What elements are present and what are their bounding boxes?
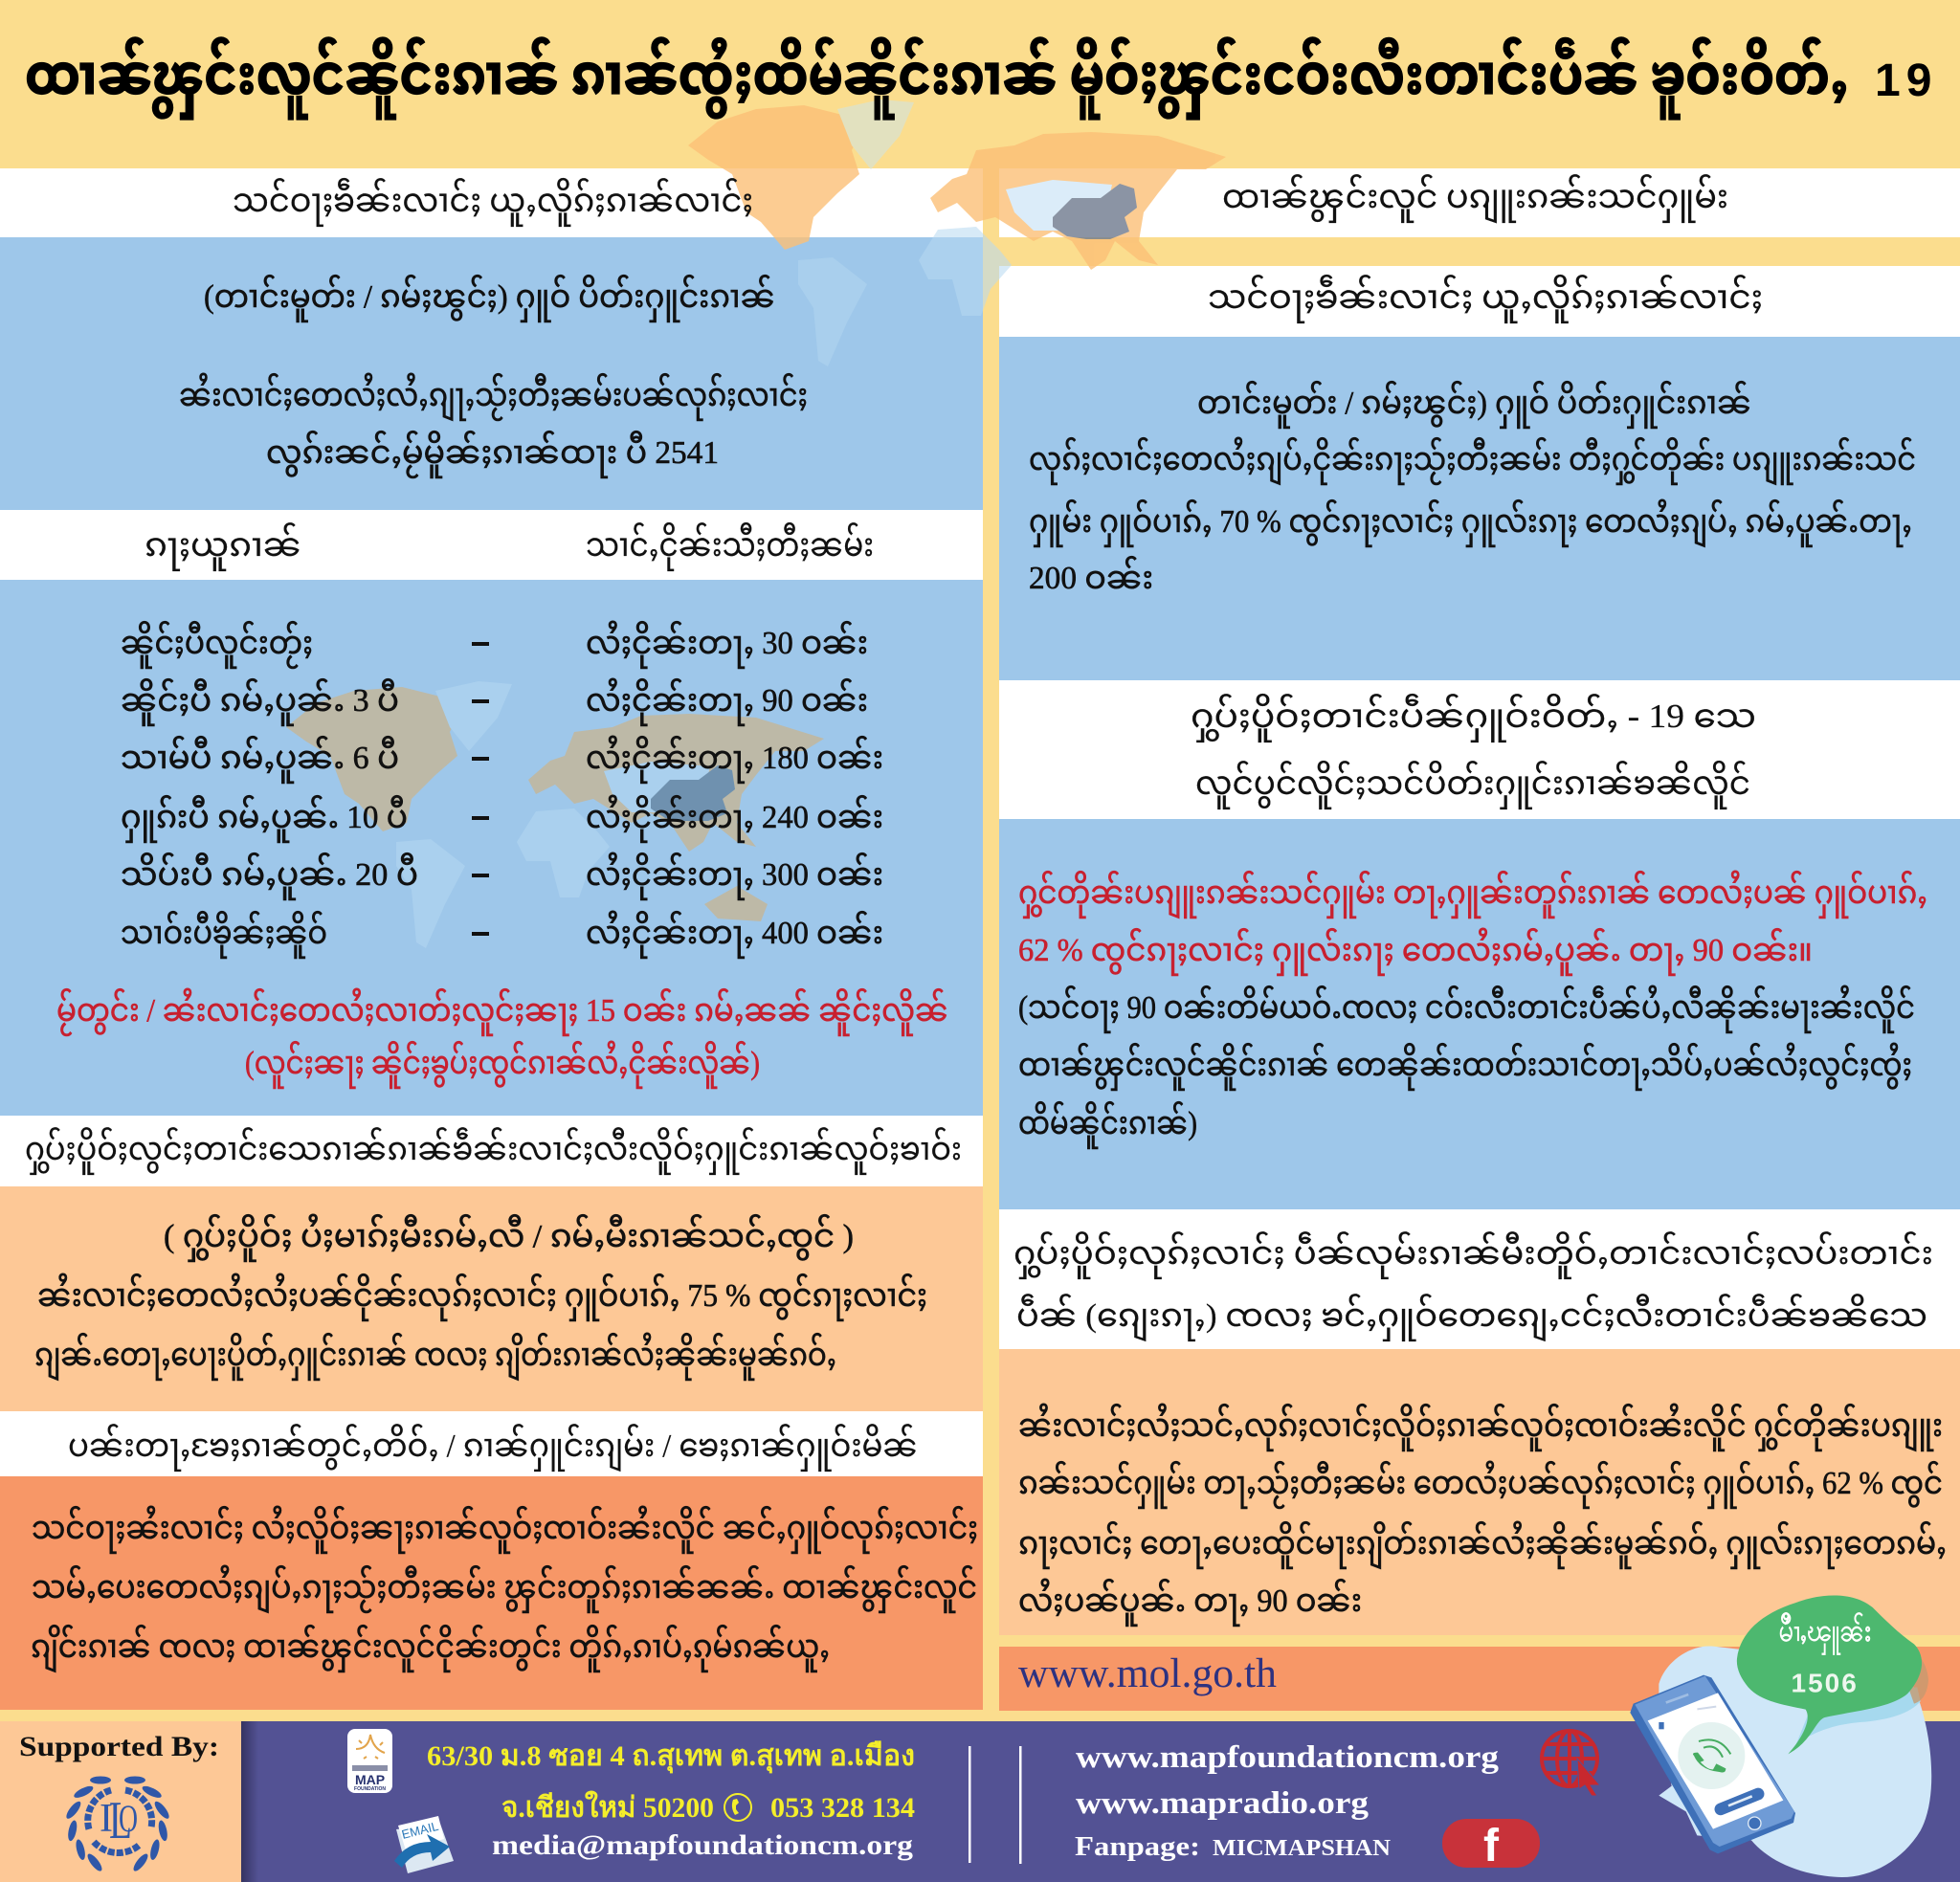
footer band — [0, 1721, 1960, 1882]
table header labels: သၢင်ႇငိုၼ်းသီႈတီႈၼမ်း — [586, 521, 874, 571]
supported by panel — [0, 1721, 258, 1882]
icon: ILO logo — [63, 1769, 172, 1874]
right covid red text: 62 % ၸွင်ၵႃႈလၢင်ႈ ႁူလ်းၵႃႈ တေလႆႈၵမ်ႇပူၼ်ႉ တႃႇ 90 ဝၼ်း။ — [1018, 926, 1813, 976]
row 6: လႆႈငိုၼ်းတႃႇ 400 ဝၼ်း — [586, 909, 883, 959]
panel: table header — [0, 510, 983, 580]
world map: faded top map — [688, 100, 1226, 366]
red note — [56, 986, 948, 1089]
row 2: ၼိူင်ႈပီ ၵမ်ႇပူၼ်ႉ 3 ပီ — [121, 676, 399, 726]
icon: globe with cursor — [1542, 1731, 1600, 1796]
footer links: Fanpage: — [1075, 1832, 1200, 1862]
footer links: www.mapradio.org — [1076, 1786, 1370, 1821]
footer links: MICMAPSHAN — [1213, 1836, 1392, 1861]
employer duties text: သင်ဝႃႈၼႆးလၢင်ႈ လႆႈလိူဝ်ႈၼႃႈၵၢၼ်လူဝ်ႈၸၢဝ်းၼႆးလိူင် ၼင်ႇႁူဝ်လုၵ်ႈလၢင်ႈ — [32, 1504, 978, 1554]
left summary text: လွၵ်းၼင်ႇမႂ်မိူၼ်ႈၵၢၼ်ထႃး ပီ 2541 — [266, 429, 719, 478]
panel: left project summary — [0, 237, 983, 510]
right header: eligibility: သင်ဝႃႈၶဵၼ်းလၢင်ႈ ယူႇလိူၵ်ႈၵၢၼ်လၢင်ႈ — [1208, 274, 1763, 323]
icon: email envelope: EMAIL — [400, 1819, 440, 1842]
divider — [1019, 1746, 1022, 1864]
red note: မႂ်တွင်း / ၼႆးလၢင်ႈတေလႆႈလၢတ်ႈလူင်ႈၼႃႈ 15 ဝၼ်း ၵမ်ႇၼၼ် ၼိူင်ႈလိူၼ် — [56, 986, 948, 1036]
gear ring — [88, 1790, 152, 1853]
world map: table background map — [286, 681, 824, 948]
thai address: จ.เชียงใหม่ 50200 — [501, 1790, 714, 1824]
covid section header: ႁွပ်ႈပိူဝ်ႈလွင်ႈတၢင်းသေၵၢၼ်ၵၢၼ်ၶဵၼ်းလၢင်ႈလီးလိူဝ်ႈႁူင်းၵၢၼ်လူဝ်ႈၶၢဝ်း — [25, 1125, 962, 1175]
table header labels: ၵႃႈယူၵၢၼ် — [145, 521, 301, 571]
peach text: ( ႁွပ်ႈပိူဝ်ႈ ပႆႈမၢၵ်ႈမီးၵမ်ႇလီ / ၵမ်ႇမီးၵၢၼ်သင်ႇၸွင် ) — [164, 1212, 854, 1262]
row 3: လႆႈငိုၼ်းတႃႇ 180 ဝၼ်း — [586, 734, 883, 784]
laurel wreath left — [63, 1769, 114, 1874]
panel: right social security header — [999, 168, 1960, 237]
employer duties text: ၵျိင်းၵၢၼ် ၸလႈ ထၢၼ်ၾွင်းလူင်ငိုၼ်းတွင်း တိူၵ်ႇၵၢပ်ႇၵုမ်ၵၼ်ယူႇ — [31, 1623, 830, 1673]
icon: MAP foundation logo: MAP — [355, 1772, 385, 1787]
panel: peach text block — [0, 1186, 983, 1411]
hotline number: 1506 — [1792, 1668, 1859, 1697]
panel: right eligibility header — [999, 266, 1960, 337]
right summary text: 200 ဝၼ်း — [1029, 554, 1153, 596]
row 4 — [121, 793, 883, 843]
thai address: 053 328 134 — [770, 1792, 915, 1824]
right closure text: လႆႈပၼ်ပူၼ်ႉ တႃႇ 90 ဝၼ်း — [1018, 1577, 1362, 1627]
thai address — [427, 1740, 915, 1824]
left summary text — [179, 273, 808, 478]
icon: facebook button — [1442, 1819, 1540, 1871]
right covid red text — [1018, 869, 1927, 976]
row 6 — [121, 909, 883, 959]
panel: right closure header — [999, 1209, 1960, 1349]
website link: www.mol.go.th — [1018, 1651, 1277, 1696]
panel: employer duties text — [0, 1476, 983, 1710]
right header: social security: ထၢၼ်ၾွင်းလူင် ပၵျူးၵၼ်းသင်ႁူမ်း — [1222, 173, 1728, 224]
icon: MAP foundation logo: FOUNDATION — [354, 1786, 386, 1792]
row 4: လႆႈငိုၼ်းတႃႇ 240 ဝၼ်း — [586, 793, 883, 843]
supported by label: Supported By: — [19, 1731, 219, 1762]
icon: email envelope — [394, 1816, 454, 1873]
peach text — [34, 1212, 927, 1382]
left summary text: (တၢင်းမူတ်း / ၵမ်ႈၽွင်ႈ) ႁူဝ် ပိတ်းႁူင်းၵၢၼ် — [204, 273, 775, 322]
panel: employer duties header — [0, 1411, 983, 1476]
title: 19 — [1875, 55, 1937, 106]
row 1 — [121, 619, 868, 669]
right closure header — [1013, 1229, 1933, 1342]
employer duties text — [31, 1504, 978, 1673]
laurel wreath right — [122, 1769, 172, 1874]
thai address: 63/30 ม.8 ซอย 4 ถ.สุเทพ ต.สุเทพ อ.เมือง — [427, 1740, 915, 1774]
employer duties text: သမ်ႇပေးတေလႆႈၵျပ်ႇၵႃႈသႂ်ႈတီႈၼမ်း ၾွင်းတူၵ်ႈၵၢၼ်ၼၼ်ႉ ထၢၼ်ၾွင်းလူင် — [32, 1563, 977, 1614]
panel: right covid header — [999, 680, 1960, 819]
hotline illustration — [1630, 1595, 1931, 1877]
bubble label: မိၢႆႇၾူၼ်း — [1778, 1612, 1871, 1655]
right covid header: လူင်ပွင်လိူင်ႈသင်ပိတ်းႁူင်းၵၢၼ်ၶၼိလိူင် — [1195, 760, 1750, 809]
right covid header — [1191, 693, 1756, 809]
left header: eligibility: သင်ဝႃႈၶဵၼ်းလၢင်ႈ ယူႇလိူၵ်ႈၵၢၼ်လၢင်ႈ — [233, 177, 753, 227]
table header labels — [145, 521, 874, 571]
row 1: လႆႈငိုၼ်းတႃႇ 30 ဝၼ်း — [586, 619, 868, 669]
row 5: လႆႈငိုၼ်းတႃႇ 300 ဝၼ်း — [586, 851, 883, 900]
speech bubble shadow — [1882, 1617, 1928, 1704]
panel: compensation table — [0, 580, 983, 1116]
icon: ILO logo: L — [109, 1791, 132, 1850]
panel: covid header — [0, 1116, 983, 1186]
right covid header: ႁွပ်ႈပိူဝ်ႈတၢင်းပဵၼ်ႁူဝ်းဝိတ်ႇ - 19 သေ — [1191, 693, 1756, 742]
row 1: ၼိူင်ႈပီလူင်းတႂ်ႈ — [121, 619, 313, 669]
peach text: ၼႆးလၢင်ႈတေလႆႈလႆႈပၼ်ငိုၼ်းလုၵ်ႈလၢင်ႈ ႁူဝ်ပၢၵ်ႇ 75 % ၸွင်ၵႃႈလၢင်ႈ — [37, 1272, 927, 1321]
speech bubble — [1737, 1595, 1922, 1754]
footer links — [1075, 1740, 1500, 1862]
row 2: လႆႈငိုၼ်းတႃႇ 90 ဝၼ်း — [586, 676, 868, 726]
row 2 — [121, 676, 868, 726]
row 6: သၢဝ်းပီၶိုၼ်ႈၼိူဝ် — [121, 909, 327, 959]
icon: ILO logo: I — [100, 1797, 113, 1841]
row 5: သိပ်းပီ ၵမ်ႇပူၼ်ႉ 20 ပီ — [121, 851, 418, 900]
right summary text: တၢင်းမူတ်း / ၵမ်ႈၽွင်ႈ) ႁူဝ် ပိတ်းႁူင်းၵၢၼ် — [1197, 379, 1751, 429]
icon: facebook button: f — [1483, 1821, 1500, 1871]
panel: right closure text — [999, 1349, 1960, 1635]
divider — [969, 1746, 970, 1863]
row 5 — [121, 851, 883, 900]
icon: phone — [1630, 1675, 1795, 1853]
icon: ILO logo: O — [119, 1797, 138, 1840]
right covid black text — [1018, 984, 1915, 1149]
panel: left eligibility header — [0, 168, 983, 237]
employer duties header: ပၼ်းတႃႇၶႄႈၵၢၼ်တွင်ႇတိဝ်ႇ / ၵၢၼ်ႁူင်းၵျမ်း / ၶေႈၵၢၼ်ႁူဝ်းမိၼ် — [68, 1422, 918, 1472]
right closure header: ႁွပ်ႈပိူဝ်ႈလုၵ်ႈလၢင်ႈ ပဵၼ်လုမ်းၵၢၼ်မီးတိူဝ်ႇတၢင်းလၢင်ႈလပ်းတၢင်း — [1013, 1229, 1933, 1279]
icon: telephone — [724, 1794, 751, 1821]
email address: media@mapfoundationcm.org — [492, 1829, 913, 1861]
panel: right covid text — [999, 819, 1960, 1209]
red note: (လူင်ႈၼႃႈ ၼိူင်ႈၶွပ်ႈၸွင်ၵၢၼ်လႆႇငိုၼ်းလိူၼ်) — [245, 1039, 760, 1089]
right closure text — [1018, 1402, 1947, 1627]
right covid black text: ထိမ်ၼိူင်းၵၢၼ်) — [1018, 1099, 1197, 1149]
icon: MAP foundation logo — [347, 1729, 392, 1793]
table: service years and compensation — [121, 619, 883, 959]
row 4: ႁူၵ်းပီ ၵမ်ႇပူၼ်ႉ 10 ပီ — [121, 793, 408, 843]
right summary text — [1029, 379, 1916, 596]
row 3 — [121, 734, 883, 784]
peach text: ၵျၼ်ႉတေႃႇပေႃးပိူတ်ႇႁူင်းၵၢၼ် ၸလႈ ၵျိတ်းၵၢၼ်လႆႈၼိုၼ်းမူၼ်ၵဝ်ႇ — [34, 1331, 836, 1382]
panel: website strip — [999, 1647, 1960, 1711]
right closure header: ပဵၼ် (ၵျေးၵႃႇ) ၸလႈ ၶင်ႇႁူဝ်တေၵျေႇငင်ႈလီးတၢင်းပဵၼ်ၶၼိသေ — [1016, 1292, 1927, 1342]
row 3: သၢမ်ပီ ၵမ်ႇပူၼ်ႉ 6 ပီ — [121, 734, 399, 784]
bubble under-shadow — [1787, 1687, 1921, 1744]
panel: right summary — [999, 337, 1960, 680]
left summary text: ၼႆးလၢင်ႈတေလႆႈလႆႇၵျႃႇသႂ်ႈတီႈၼမ်းပၼ်လုၵ်ႈလၢင်ႈ — [179, 371, 808, 422]
icon: pale blue blob — [1659, 1646, 1931, 1877]
footer links: www.mapfoundationcm.org — [1076, 1740, 1500, 1775]
